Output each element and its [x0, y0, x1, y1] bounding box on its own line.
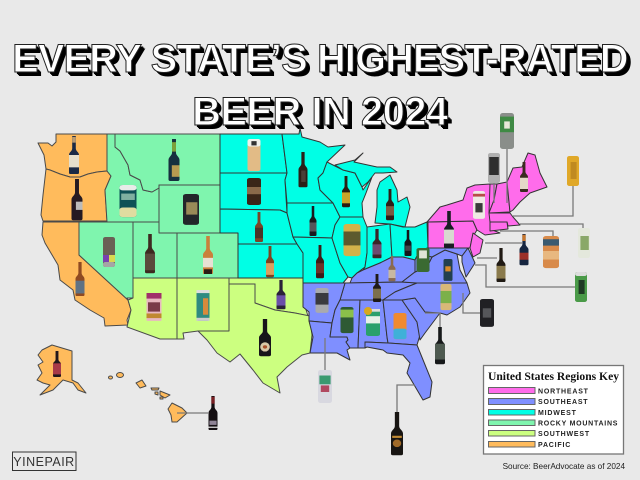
bottle: South Carolina — [435, 327, 445, 364]
bottle: Ohio — [404, 230, 412, 256]
bottle: Pennsylvania — [444, 211, 454, 248]
can: South Carolina coast — [480, 299, 494, 327]
logo: VinePair: YINEPAIR — [13, 455, 75, 469]
bottle: California — [76, 262, 84, 296]
can: Connecticut — [543, 236, 559, 268]
icon: gold medal — [364, 307, 372, 315]
can: Arizona — [146, 293, 162, 321]
can: Maryland — [575, 272, 587, 302]
legend swatch: Pacific: PACIFIC — [538, 442, 571, 449]
legend title: United States Regions Key — [488, 370, 619, 383]
bottle: Missouri — [316, 245, 324, 278]
bottle: Nebraska — [255, 212, 263, 242]
bottle: Maine — [520, 162, 528, 192]
can: Georgia — [394, 313, 406, 339]
can: Massachusetts — [567, 156, 579, 186]
bottle: Delaware — [496, 248, 506, 282]
legend swatch: Rocky Mountains: ROCKY MOUNTAINS — [538, 420, 618, 428]
bottle: Indiana — [372, 229, 382, 258]
can: Louisiana — [318, 370, 332, 403]
can: Arkansas — [316, 288, 328, 313]
bottle: Kentucky — [388, 256, 396, 281]
can: West Virginia — [416, 248, 430, 272]
can: North Carolina — [440, 284, 452, 310]
map: Southwest region — [127, 278, 312, 393]
can: North Dakota — [248, 139, 260, 171]
title: BEER IN 2024 — [192, 90, 448, 134]
bottle: Texas — [259, 319, 271, 356]
legend swatch: Midwest: MIDWEST — [538, 410, 577, 417]
bottle: Tennessee — [373, 274, 381, 302]
legend swatch: Northeast: NORTHEAST — [538, 388, 589, 396]
can: Rhode Island — [578, 228, 590, 258]
bottle: Colorado — [203, 236, 213, 274]
can: New Mexico — [196, 290, 210, 321]
can: Virginia — [444, 259, 452, 281]
leader lines — [177, 147, 583, 413]
map: Midwest region — [220, 128, 428, 283]
can: Illinois — [344, 224, 360, 256]
title — [12, 37, 631, 134]
map: Pacific region — [37, 134, 187, 422]
can: Wyoming — [183, 194, 199, 225]
title: EVERY STATE’S HIGHEST-RATED — [12, 37, 628, 81]
can: Idaho — [120, 185, 136, 217]
can: Mississippi — [340, 307, 354, 333]
can: New York — [473, 191, 485, 219]
map: Rocky Mountains region — [79, 134, 238, 300]
can: South Dakota — [247, 178, 261, 205]
bottle: Alaska — [53, 351, 61, 377]
bottle: Kansas — [266, 246, 274, 277]
bottle: Florida — [391, 412, 403, 455]
bottle: New Jersey — [520, 234, 528, 265]
bottle: Iowa — [310, 206, 316, 236]
source note: Source: BeerAdvocate as of 2024 — [503, 462, 625, 471]
bottle: Wisconsin — [342, 176, 350, 207]
bottle: Hawaii — [208, 396, 218, 430]
can: Alabama — [366, 309, 380, 336]
map: Northeast region — [427, 153, 547, 257]
bottle: Washington — [69, 136, 79, 174]
legend swatch: Southwest: SOUTHWEST — [538, 431, 590, 438]
can: New Hampshire — [500, 113, 514, 149]
can: Vermont — [488, 153, 500, 183]
bottle: Utah — [145, 234, 155, 273]
bottle: Montana — [168, 139, 180, 181]
legend: United States Regions Key — [484, 366, 624, 454]
bottle: Oregon — [72, 179, 82, 220]
bottle: Minnesota — [298, 152, 308, 187]
bottle: Michigan — [386, 189, 394, 220]
can: Nevada — [103, 237, 115, 267]
map: Southeast region — [303, 248, 475, 400]
legend swatch: Southeast: SOUTHEAST — [538, 399, 588, 406]
bottle: Oklahoma — [276, 280, 286, 309]
